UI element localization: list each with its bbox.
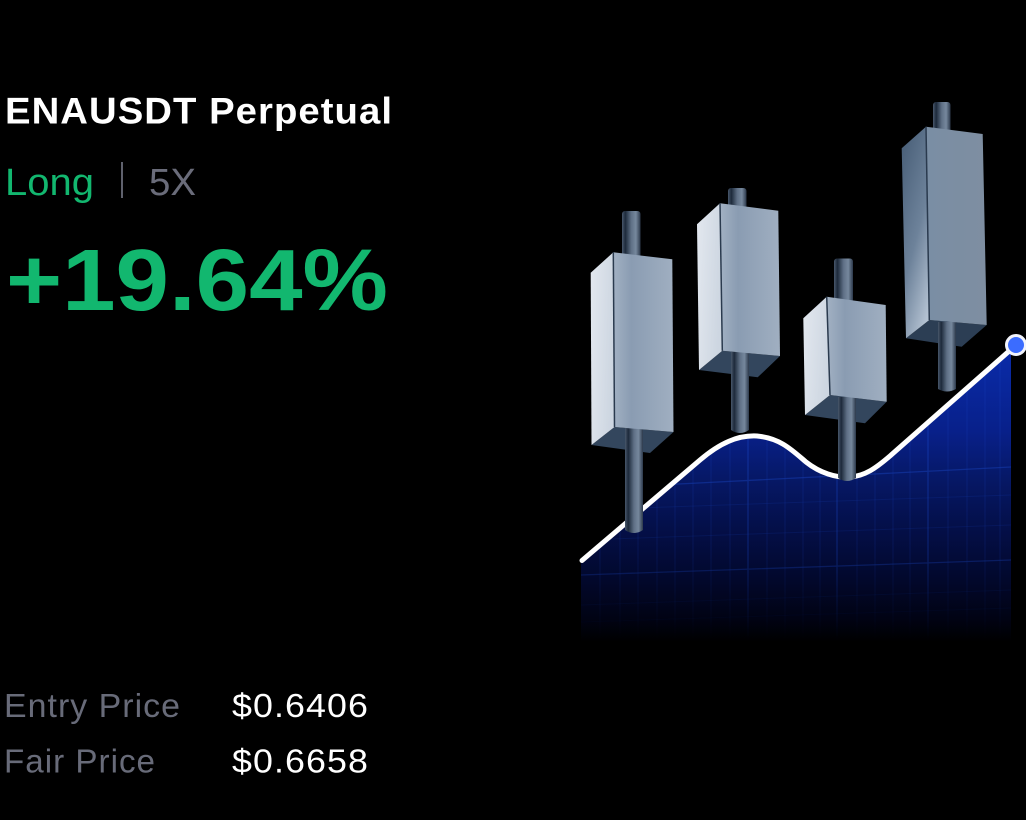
price table	[4, 687, 369, 780]
candlestick 4	[902, 102, 987, 392]
white price line	[582, 345, 1016, 560]
profit percentage: +19.64%	[6, 232, 388, 329]
entry price label: Entry Price	[4, 687, 181, 724]
direction and leverage	[5, 162, 196, 204]
line end dot	[1006, 336, 1026, 354]
title: ENAUSDT Perpetual	[5, 90, 393, 132]
candlestick 2	[697, 188, 780, 433]
fair price value: $0.6658	[232, 742, 369, 780]
chart illustration	[581, 102, 1026, 642]
candlestick 3	[803, 258, 887, 481]
leverage: 5X	[149, 162, 196, 204]
candlestick 1	[591, 211, 674, 533]
fair price label: Fair Price	[4, 742, 156, 780]
entry price value: $0.6406	[232, 687, 369, 724]
blue area under line	[581, 350, 1011, 642]
position side: Long	[5, 162, 94, 204]
